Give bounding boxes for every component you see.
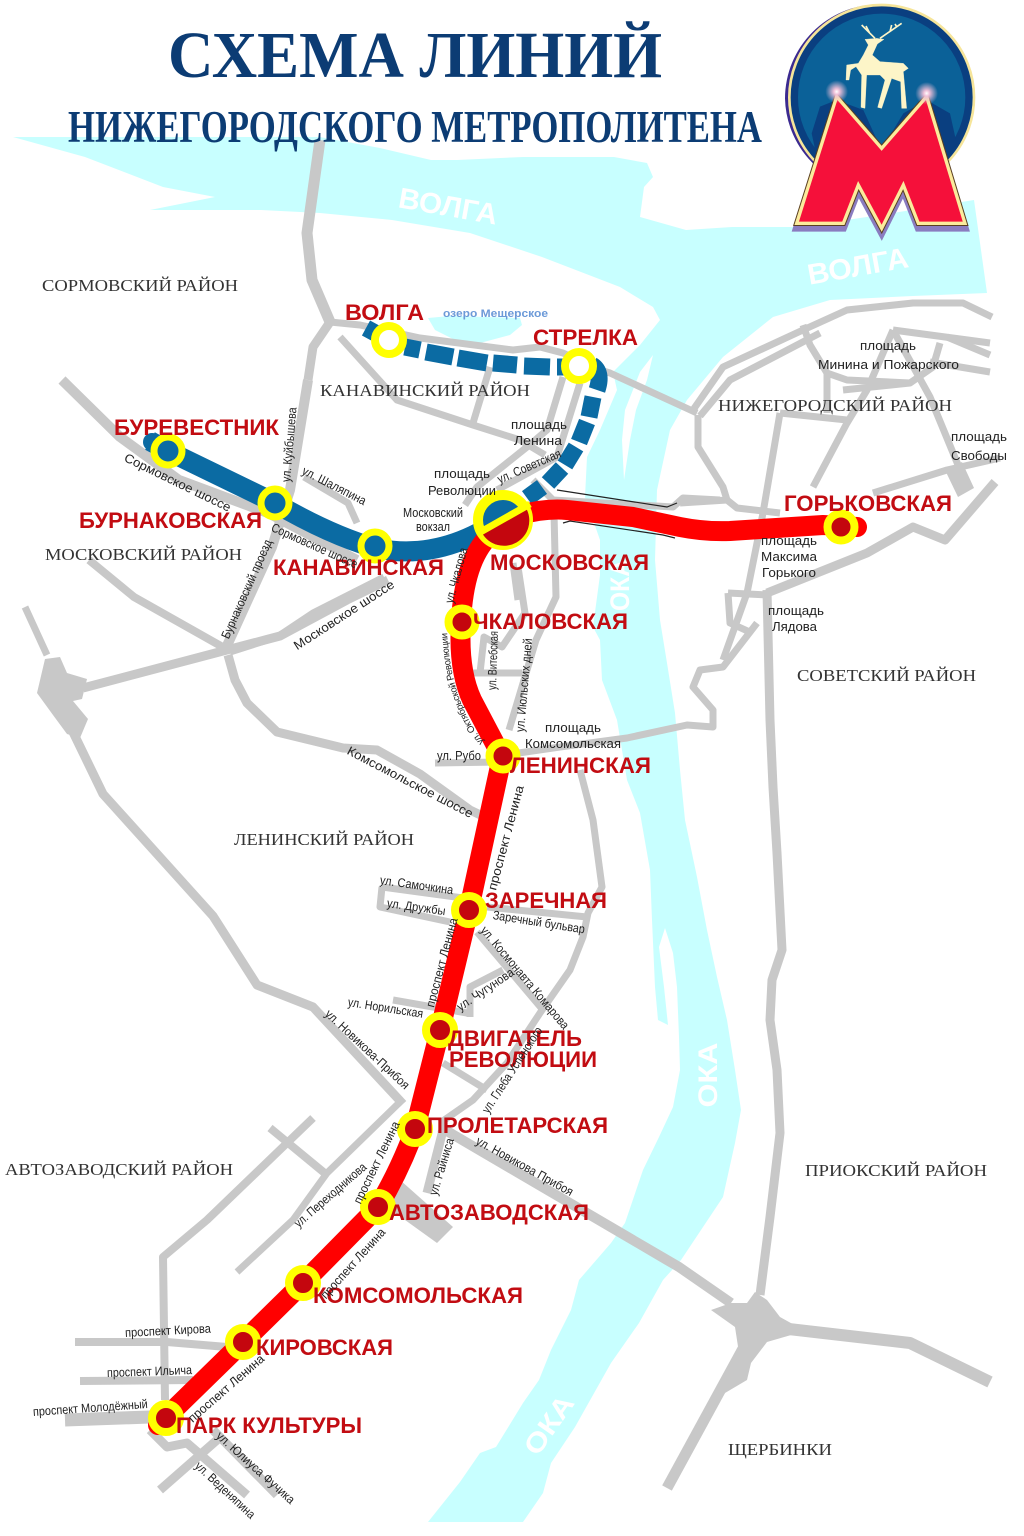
station: Двигатель Революции: РЕВОЛЮЦИИ: [449, 1047, 597, 1072]
station: Буревестник: [114, 415, 280, 465]
district labels: АВТОЗАВОДСКИЙ РАЙОН: [5, 1160, 233, 1179]
street labels: проспект Ленина: [318, 1225, 388, 1302]
street labels: проспект Ленина: [185, 1352, 267, 1425]
bridge outlines: [557, 490, 677, 538]
station: Ленинская: [490, 742, 651, 778]
street labels: ул. Чугунова: [454, 965, 517, 1014]
street labels: ул. Космонавта Комарова: [478, 924, 572, 1032]
street labels: ул. Куйбышева: [279, 407, 300, 483]
station: Автозаводская: [364, 1193, 589, 1225]
street labels: ул. Райниса: [426, 1137, 457, 1197]
station: Горьковская: [784, 491, 952, 540]
square and landmark labels: площадь: [860, 339, 916, 353]
street labels: проспект Ильича: [107, 1363, 192, 1380]
square and landmark labels: Комсомольская: [525, 737, 621, 751]
station: Парк культуры: [152, 1404, 362, 1438]
square and landmark labels: вокзал: [416, 520, 450, 534]
square and landmark labels: [403, 339, 1007, 763]
street labels: ул. Веденяпина: [192, 1459, 258, 1522]
street labels: ул. Норильская: [347, 995, 424, 1021]
river labels: ВОЛГА: [396, 183, 500, 231]
street labels: ул. Новикова-Прибоя: [322, 1007, 412, 1092]
station: Волга: [345, 300, 424, 354]
station: Комсомольская: КОМСОМОЛЬСКАЯ: [313, 1283, 523, 1308]
street labels: Заречный бульвар: [492, 908, 586, 936]
street labels: ул. Советская: [495, 446, 563, 486]
square and landmark labels: Минина и Пожарского: [818, 358, 959, 372]
square and landmark labels: Свободы: [951, 449, 1007, 463]
station: Стрелка: [533, 325, 638, 380]
district labels: ЩЕРБИНКИ: [728, 1440, 832, 1459]
station: Пролетарская: ПРОЛЕТАРСКАЯ: [427, 1113, 608, 1138]
station: Московская interchange: МОСКОВСКАЯ: [490, 550, 649, 575]
street labels: Бурнаковский проезд: [219, 537, 275, 641]
river labels: ВОЛГА: [805, 242, 911, 292]
station: Бурнаковская: БУРНАКОВСКАЯ: [79, 508, 262, 533]
station: Двигатель Революции: ДВИГАТЕЛЬ: [448, 1026, 582, 1051]
station: Ленинская: ЛЕНИНСКАЯ: [510, 753, 651, 778]
station: Парк культуры: ПАРК КУЛЬТУРЫ: [176, 1413, 362, 1438]
district labels: СОРМОВСКИЙ РАЙОН: [42, 276, 238, 295]
district labels: МОСКОВСКИЙ РАЙОН: [45, 545, 242, 564]
street labels: ул. Дружбы: [386, 896, 446, 918]
logo: Nizhny Novgorod metro emblem: [785, 4, 974, 233]
square and landmark labels: площадь: [768, 604, 824, 618]
street labels: ул. Витебская: [485, 631, 501, 690]
district labels: [5, 276, 987, 1459]
lake label: озеро Мещерское: [443, 308, 548, 320]
station: Чкаловская: ЧКАЛОВСКАЯ: [473, 609, 628, 634]
square and landmark labels: площадь: [761, 534, 817, 548]
station: Заречная: [455, 888, 607, 924]
street labels: ул. Новикова Прибоя: [474, 1134, 576, 1199]
square and landmark labels: Революции: [428, 484, 496, 498]
station: Канавинская: КАНАВИНСКАЯ: [273, 555, 444, 580]
street labels: проспект Молодёжный: [33, 1397, 148, 1419]
street labels: ул. Октябрьской Революции: [442, 634, 486, 746]
street labels: Комсомольское шоссе: [345, 744, 475, 821]
street labels: проспект Ленина: [351, 1119, 403, 1206]
square and landmark labels: Горького: [762, 566, 816, 580]
square and landmark labels: Максима: [761, 550, 817, 564]
square and landmark labels: Ленина: [514, 434, 562, 448]
district labels: ЛЕНИНСКИЙ РАЙОН: [234, 830, 414, 849]
station: Двигатель Революции: [426, 1016, 597, 1072]
street labels: проспект Кирова: [125, 1322, 211, 1340]
district labels: ПРИОКСКИЙ РАЙОН: [805, 1161, 987, 1180]
station: Кировская: [229, 1328, 393, 1360]
square and landmark labels: площадь: [511, 418, 567, 432]
street labels: ул. Глеба Успенского: [479, 1024, 545, 1116]
street labels: проспект Ленина: [485, 784, 527, 892]
square and landmark labels: Московский: [403, 506, 463, 520]
station: Канавинская: [273, 532, 444, 580]
station: Комсомольская: [289, 1269, 523, 1308]
square and landmark labels: площадь: [434, 467, 490, 481]
street labels: Сормовское шоссе: [122, 451, 233, 515]
street labels: проспект Ленина: [423, 916, 461, 1009]
station: Стрелка: СТРЕЛКА: [533, 325, 638, 350]
title: НИЖЕГОРОДСКОГО МЕТРОПОЛИТЕНА: [68, 102, 762, 152]
river labels: ОКА: [605, 559, 635, 611]
street labels: ул. Чкалова: [442, 546, 471, 605]
red metro line: [158, 510, 857, 1425]
station: Кировская: КИРОВСКАЯ: [256, 1335, 393, 1360]
street labels: ул. Самочкина: [379, 873, 454, 897]
station: Заречная: ЗАРЕЧНАЯ: [485, 888, 607, 913]
square and landmark labels: площадь: [545, 721, 601, 735]
square and landmark labels: ул. Рубо: [437, 749, 481, 763]
blue metro line: [143, 328, 599, 551]
district labels: СОВЕТСКИЙ РАЙОН: [797, 666, 976, 685]
station: Волга: ВОЛГА: [345, 300, 424, 325]
square and landmark labels: площадь: [951, 430, 1007, 444]
street labels: ул. Июльских дней: [513, 638, 535, 733]
street labels: ул. Шаляпина: [300, 464, 369, 508]
station: Московская interchange: [477, 495, 649, 575]
station: Горьковская: ГОРЬКОВСКАЯ: [784, 491, 952, 516]
street labels: [33, 407, 586, 1522]
station: Бурнаковская: [79, 489, 289, 533]
street labels: Сормовское шоссе: [269, 521, 360, 571]
street labels: ул. Переходникова: [291, 1160, 369, 1230]
river labels: [396, 183, 911, 1461]
street labels: Московское шоссе: [291, 577, 397, 653]
river labels: ОКА: [693, 1042, 723, 1108]
street labels: ул. Юлиуса Фучика: [213, 1429, 298, 1507]
icon: white deer: [846, 23, 908, 108]
square and landmark labels: Лядова: [772, 620, 817, 634]
river labels: ОКА: [518, 1389, 580, 1461]
title: [68, 19, 762, 152]
title: СХЕМА ЛИНИЙ: [168, 19, 662, 92]
station: Буревестник: БУРЕВЕСТНИК: [114, 415, 280, 440]
district labels: КАНАВИНСКИЙ РАЙОН: [320, 381, 530, 400]
station: Автозаводская: АВТОЗАВОДСКАЯ: [389, 1200, 589, 1225]
district labels: НИЖЕГОРОДСКИЙ РАЙОН: [718, 396, 952, 415]
